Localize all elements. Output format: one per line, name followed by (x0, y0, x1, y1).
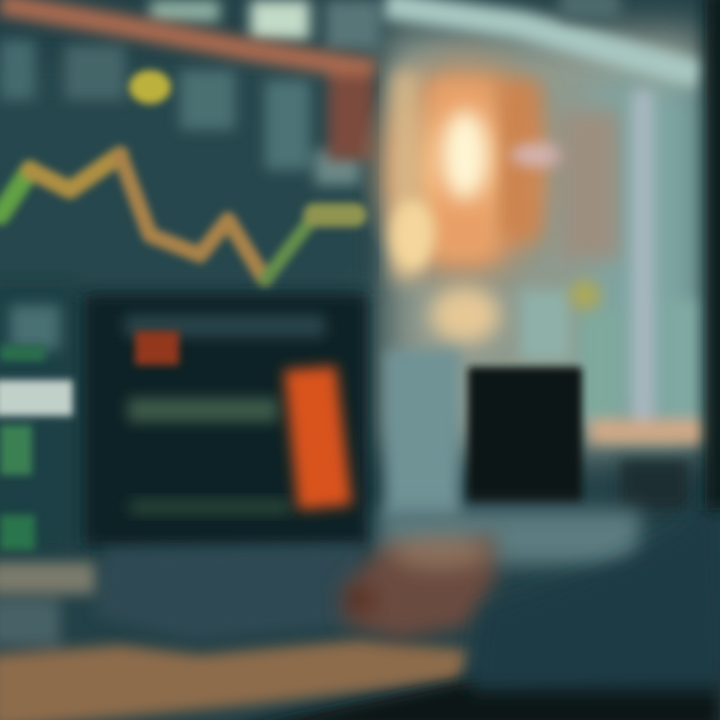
sleeve and arm (470, 480, 720, 690)
left monitor wall (0, 60, 370, 560)
yellow marker (129, 70, 171, 104)
laptop header bar (125, 315, 325, 337)
red square icon (135, 331, 179, 365)
dark device right of phone (620, 460, 690, 510)
sunburst glow (355, 30, 620, 343)
laptop green chart row (128, 398, 278, 422)
lower teal area (380, 510, 640, 565)
upper left screen tiles (0, 0, 380, 350)
orange bar (284, 366, 352, 510)
laptop lower row (130, 500, 290, 514)
right edge shadow (705, 0, 720, 510)
right pillars (385, 90, 705, 520)
laptop screen (84, 294, 368, 546)
left side green bars (0, 345, 73, 550)
top right pale band (385, 5, 700, 75)
line chart: green, orange and yellow segments (0, 155, 355, 280)
black phone (468, 367, 582, 503)
hand (340, 535, 495, 640)
orange top line (0, 4, 375, 160)
yellow accent (570, 280, 600, 310)
desk surface (0, 562, 470, 720)
laptop base (95, 545, 365, 640)
bottom shadow (230, 670, 720, 720)
right window background (385, 30, 710, 450)
top right dark corner (560, 0, 620, 20)
